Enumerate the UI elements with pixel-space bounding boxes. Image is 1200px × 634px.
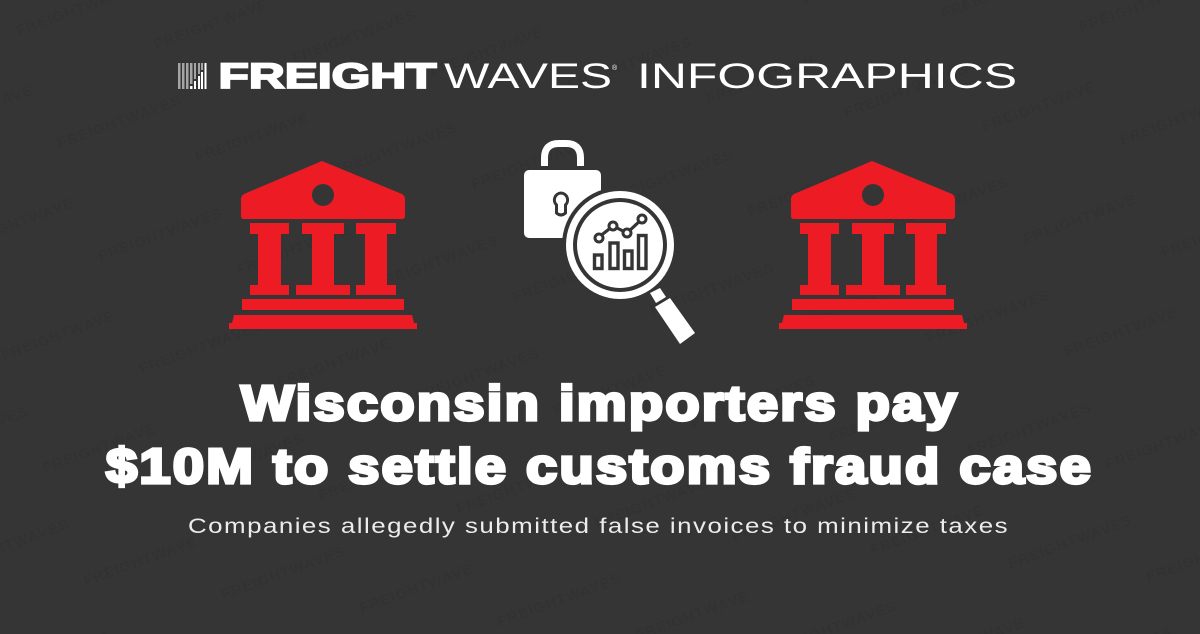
logo text: WAVES: WAVES [444,57,612,96]
magnifying glass [562,187,695,344]
title: Wisconsin importers pay [241,377,959,431]
registered mark: ® [612,64,618,72]
logo header [178,57,1017,96]
title [106,377,1093,494]
icon: logo bars [178,63,206,89]
subtitle: Companies allegedly submitted false invoices to minimize taxes [188,515,1009,538]
icon: left bank building [229,161,417,329]
logo text: INFOGRAPHICS: INFOGRAPHICS [637,57,1017,96]
title: $10M to settle customs fraud case [106,440,1093,494]
logo text: FREIGHT: FREIGHT [218,57,436,96]
icon: padlock and magnifying glass [524,144,695,344]
icon: right bank building [779,161,967,329]
padlock [524,144,601,238]
mini chart [594,215,646,268]
